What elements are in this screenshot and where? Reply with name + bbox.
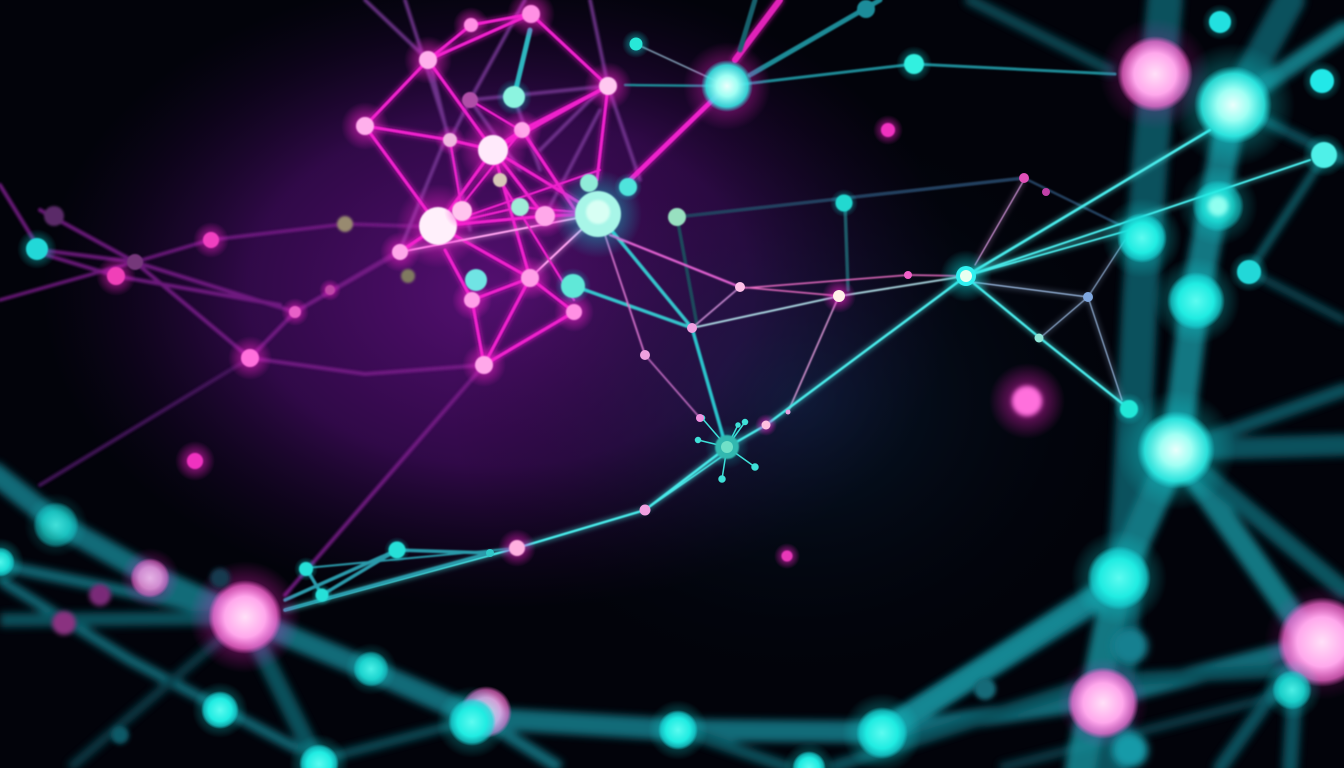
- small star-shaped cell node: [696, 416, 758, 482]
- teal blurred strands: lower left arc: [0, 470, 1300, 768]
- bright signal links: [285, 130, 1310, 610]
- dim blue links: [677, 178, 1120, 325]
- small junction nodes on the thin links: [486, 173, 1093, 557]
- magenta network links: [365, 0, 780, 365]
- thin cyan and pink centre network: [285, 0, 1310, 610]
- teal upper links: [514, 0, 1115, 97]
- magenta blurred strands: left arc: [0, 185, 574, 595]
- purple background links: [365, 0, 640, 250]
- central branch links: [574, 214, 966, 440]
- teal blurred strands: right column: [880, 0, 1344, 768]
- magenta nodes: [44, 0, 1065, 569]
- lower teal links: [285, 548, 517, 610]
- cyan nodes: [17, 0, 1344, 606]
- upper left magenta network: [365, 0, 780, 365]
